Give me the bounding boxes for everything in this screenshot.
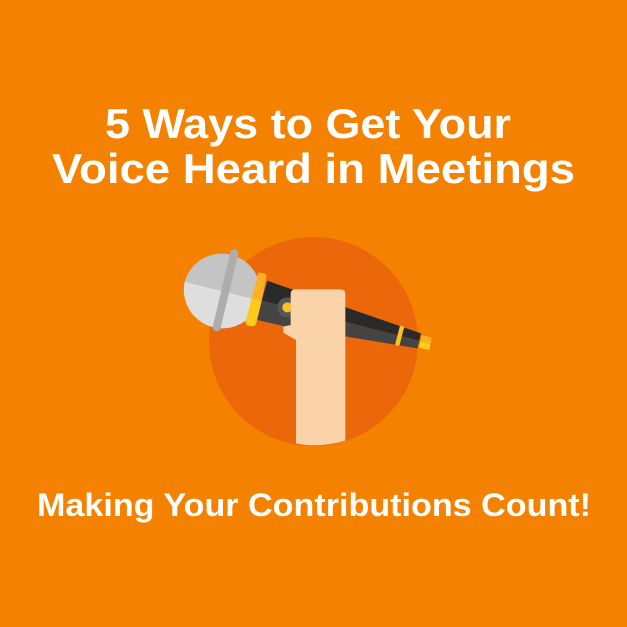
title: 5 Ways to Get Your: [105, 100, 511, 147]
title: Voice Heard in Meetings: [52, 145, 575, 192]
subtitle: Making Your Contributions Count!: [37, 487, 591, 523]
microphone collar: [245, 272, 267, 326]
microphone body: [257, 281, 421, 348]
icon: orange circle backdrop: [209, 237, 418, 446]
microphone tip: [419, 335, 432, 350]
microphone head: [184, 253, 261, 328]
icon: hand holding microphone: [184, 253, 432, 445]
microphone switch: [277, 297, 297, 317]
hand: [283, 289, 345, 445]
microphone yellow band: [395, 326, 404, 346]
title: [52, 100, 575, 192]
